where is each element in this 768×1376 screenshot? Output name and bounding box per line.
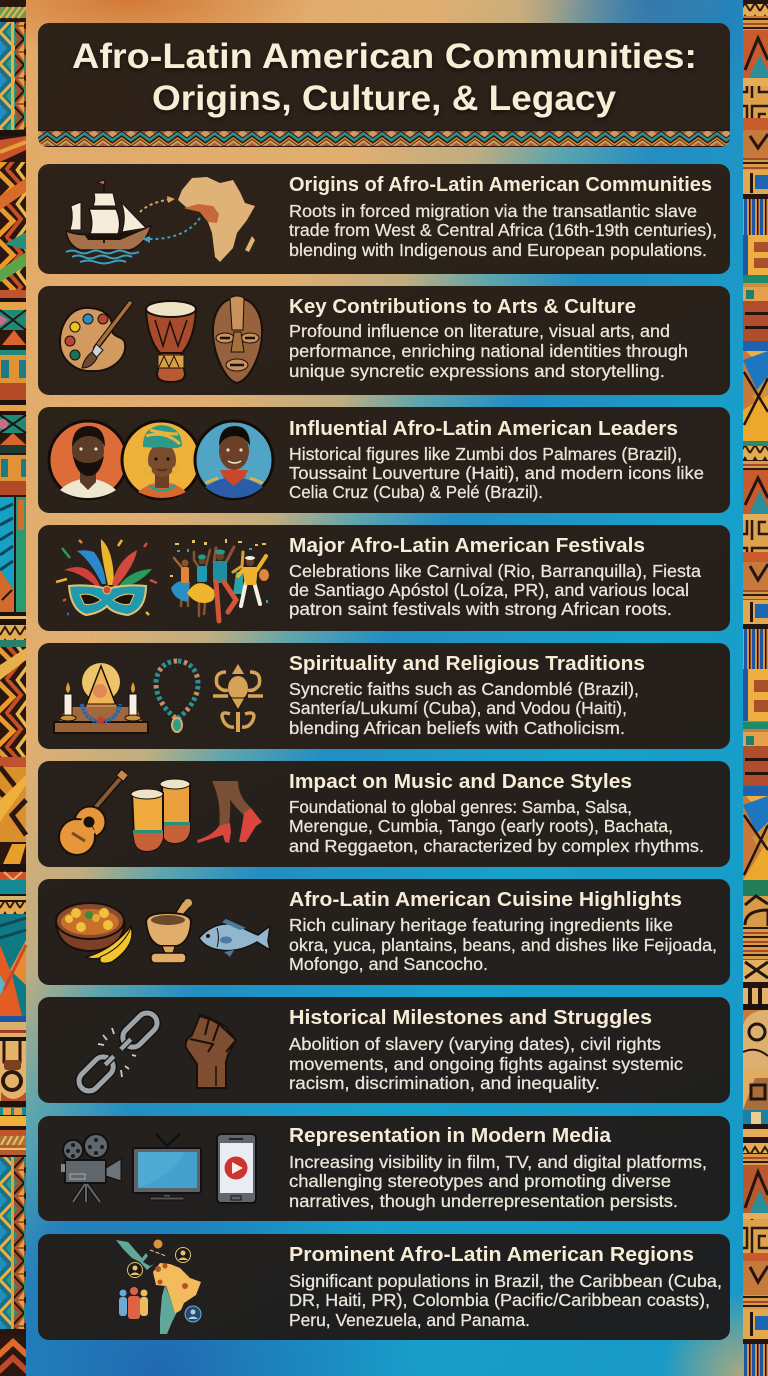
text block: Historical figures like Zumbi dos Palmares (Brazil), xyxy=(289,444,682,464)
heading: Impact on Music and Dance Styles xyxy=(289,770,632,793)
icon: carnival mask and dancers xyxy=(56,539,269,621)
icon: altar, beads, symbol xyxy=(54,661,263,733)
text block xyxy=(289,1034,683,1093)
text block: Foundational to global genres: Samba, Salsa, xyxy=(289,797,632,817)
icon: three leader portraits xyxy=(49,421,273,499)
text block xyxy=(289,915,717,974)
text block: Celebrations like Carnival (Rio, Barranquilla), Fiesta xyxy=(289,561,701,581)
text block xyxy=(289,321,688,381)
title banner xyxy=(38,23,730,147)
heading: Afro-Latin American Cuisine Highlights xyxy=(289,888,682,911)
panel: music and dance xyxy=(38,761,730,867)
left patterned border xyxy=(0,0,26,1376)
icon: guitar, congas, dancing legs xyxy=(59,769,262,855)
text block: Abolition of slavery (varying dates), civil rights xyxy=(289,1034,661,1054)
text block: Mofongo, and Sancocho. xyxy=(289,954,488,974)
text block: blending African beliefs with Catholicism. xyxy=(289,718,625,738)
text block: Roots in forced migration via the transatlantic slave xyxy=(289,201,697,221)
heading: Spirituality and Religious Traditions xyxy=(289,652,645,675)
text block: Merengue, Cumbia, Tango (early roots), Bachata, xyxy=(289,816,673,836)
title: Origins, Culture, & Legacy xyxy=(152,79,617,118)
text block: narratives, though underrepresentation persists. xyxy=(289,1191,678,1211)
dancers xyxy=(171,547,269,621)
text block xyxy=(289,679,639,738)
panel: festivals xyxy=(38,525,730,631)
heading: Prominent Afro-Latin American Regions xyxy=(289,1243,694,1266)
panel: regions xyxy=(38,1234,730,1340)
text block: Syncretic faiths such as Candomblé (Brazil), xyxy=(289,679,639,699)
icon: ship and Africa map xyxy=(66,177,255,264)
icon: stew bowl, bananas, mortar, fish xyxy=(56,899,270,963)
text block: DR, Haiti, PR), Colombia (Pacific/Caribbean coasts), xyxy=(289,1290,710,1310)
title xyxy=(72,37,697,118)
text block: okra, yuca, plantains, beans, and dishes like Feijoada, xyxy=(289,935,717,955)
heading: Representation in Modern Media xyxy=(289,1124,612,1147)
text block: and Reggaeton, characterized by complex rhythms. xyxy=(289,836,704,856)
panel: origins xyxy=(38,164,730,274)
text block xyxy=(289,1271,722,1330)
icon: film camera, TV, smartphone xyxy=(61,1134,256,1203)
panel: arts and culture xyxy=(38,286,730,395)
right patterned border xyxy=(743,0,768,1376)
text block: Toussaint Louverture (Haiti), and modern icons like xyxy=(289,463,704,483)
text block: de Santiago Apóstol (Loíza, PR), and various local xyxy=(289,580,689,600)
panel: spirituality xyxy=(38,643,730,749)
text block: performance, enriching national identities through xyxy=(289,341,688,361)
icon: map of Latin America with people xyxy=(116,1240,201,1334)
text block xyxy=(289,1152,707,1211)
text block: trade from West & Central Africa (16th-19th centuries), xyxy=(289,220,717,240)
panel: leaders xyxy=(38,407,730,513)
text block: Significant populations in Brazil, the Caribbean (Cuba, xyxy=(289,1271,722,1291)
text block xyxy=(289,561,701,619)
text block: Rich culinary heritage featuring ingredients like xyxy=(289,915,673,935)
text block xyxy=(289,444,704,502)
text block: challenging stereotypes and promoting diverse xyxy=(289,1171,671,1191)
text block: Peru, Venezuela, and Panama. xyxy=(289,1310,530,1330)
icon: palette, drum, mask xyxy=(60,296,262,383)
title: Afro-Latin American Communities: xyxy=(72,37,697,76)
text block: racism, discrimination, and inequality. xyxy=(289,1073,600,1093)
heading: Influential Afro-Latin American Leaders xyxy=(289,417,678,440)
heading: Key Contributions to Arts & Culture xyxy=(289,295,636,318)
text block: movements, and ongoing fights against systemic xyxy=(289,1054,683,1074)
panel: milestones xyxy=(38,997,730,1103)
panel: cuisine xyxy=(38,879,730,985)
text block: Celia Cruz (Cuba) & Pelé (Brazil). xyxy=(289,482,543,502)
text block: unique syncretic expressions and storytelling. xyxy=(289,361,665,381)
text block: blending with Indigenous and European populations. xyxy=(289,240,707,260)
heading: Historical Milestones and Struggles xyxy=(289,1006,652,1029)
heading: Major Afro-Latin American Festivals xyxy=(289,534,645,557)
heading: Origins of Afro-Latin American Communities xyxy=(289,173,712,196)
zigzag band xyxy=(38,130,730,147)
panel: media xyxy=(38,1116,730,1221)
icon: broken chain and raised fist xyxy=(75,1009,236,1095)
text block xyxy=(289,797,704,856)
text block: patron saint festivals with strong African roots. xyxy=(289,599,672,619)
text block: Profound influence on literature, visual arts, and xyxy=(289,321,670,341)
text block: Santería/Lukumí (Cuba), and Vodou (Haiti), xyxy=(289,698,627,718)
text block: Increasing visibility in film, TV, and digital platforms, xyxy=(289,1152,707,1172)
text block xyxy=(289,201,717,260)
